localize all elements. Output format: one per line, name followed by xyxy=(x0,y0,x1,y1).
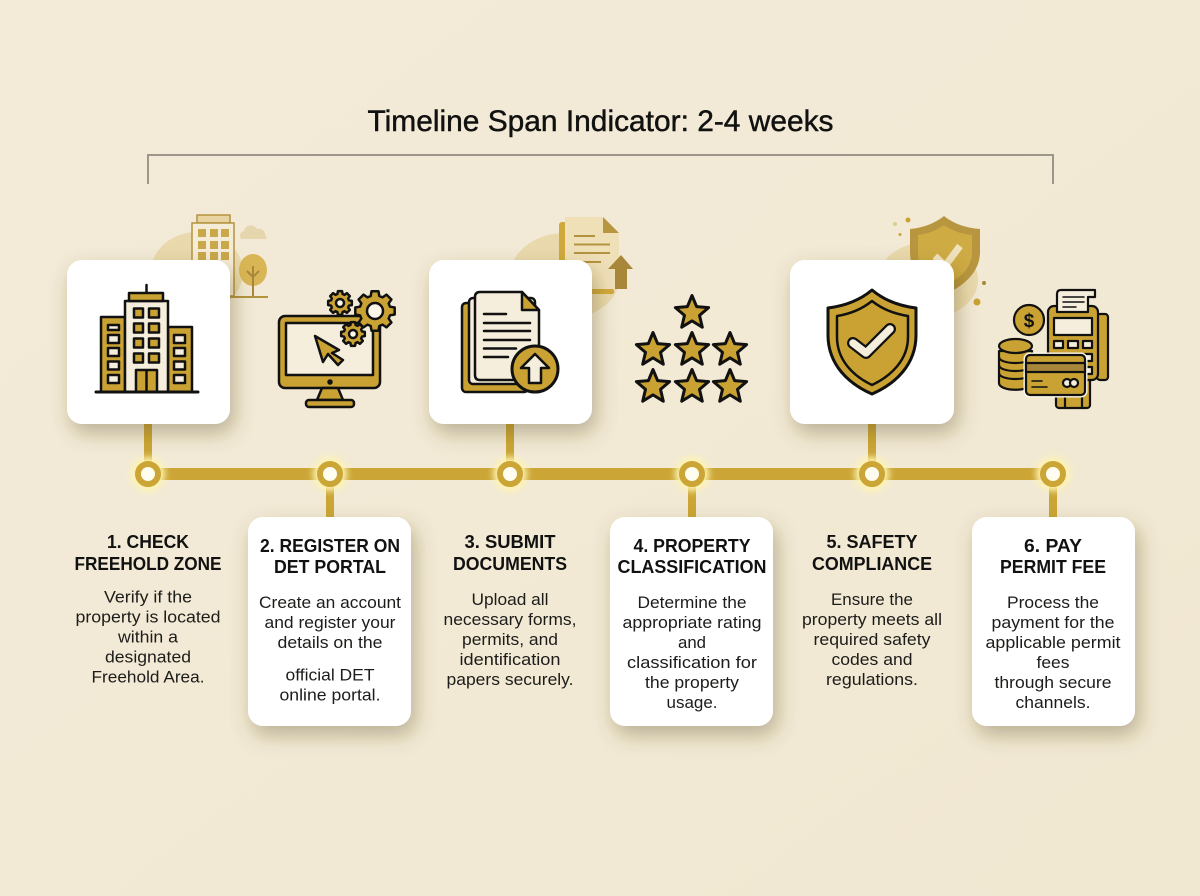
description xyxy=(259,594,401,704)
heading: 6. PAY xyxy=(1024,535,1083,556)
heading: PERMIT FEE xyxy=(1000,556,1106,577)
icon: office building xyxy=(96,285,198,392)
description: regulations. xyxy=(826,671,918,689)
description: Ensure the xyxy=(831,591,913,609)
heading: FREEHOLD ZONE xyxy=(74,553,222,574)
title: Timeline Span Indicator: 2-4 weeks xyxy=(368,105,834,138)
heading xyxy=(1000,535,1106,577)
heading: 4. PROPERTY xyxy=(634,535,751,556)
heading xyxy=(260,535,400,577)
description: fees xyxy=(1036,654,1070,672)
icon: shield with check xyxy=(828,290,916,394)
panel: step 2 card xyxy=(248,517,411,726)
timeline track xyxy=(144,423,1057,518)
panel: step 6 card xyxy=(972,517,1135,726)
description: codes and xyxy=(832,651,912,669)
panel: icon card 3 xyxy=(429,260,592,424)
description: identification xyxy=(460,651,560,669)
panel: icon card 1 xyxy=(67,260,230,424)
description: Create an account xyxy=(259,594,401,612)
heading: 5. SAFETY xyxy=(826,531,918,552)
heading: 2. REGISTER ON xyxy=(260,535,400,556)
icon: rating stars xyxy=(636,296,747,401)
icon: computer with gears xyxy=(279,291,395,407)
heading: DOCUMENTS xyxy=(453,553,567,574)
step 4: property classification xyxy=(610,517,773,726)
step 6: pay permit fee xyxy=(972,517,1135,726)
heading xyxy=(74,531,222,574)
description: appropriate rating xyxy=(622,614,762,632)
heading: COMPLIANCE xyxy=(812,553,932,574)
step 2: register on DET portal xyxy=(248,517,411,726)
icon: faded building background xyxy=(151,215,268,312)
heading xyxy=(453,531,567,574)
description xyxy=(986,594,1121,712)
description: usage. xyxy=(666,694,718,712)
description: Determine the xyxy=(638,594,746,612)
timeline span bracket xyxy=(148,155,1053,184)
description xyxy=(444,591,576,689)
description: Upload all xyxy=(472,591,548,609)
description: necessary forms, xyxy=(444,611,576,629)
panel: icon card 5 xyxy=(790,260,954,424)
description xyxy=(622,594,762,712)
icon: payment terminal, coins and card xyxy=(999,290,1108,408)
description: the property xyxy=(645,674,740,692)
description: official DET xyxy=(286,666,374,684)
icon: faded document background xyxy=(510,217,633,319)
description: Process the xyxy=(1007,594,1099,612)
description xyxy=(76,588,220,686)
description: property meets all xyxy=(802,611,942,629)
heading xyxy=(812,531,932,574)
description: and xyxy=(678,634,706,652)
description: Verify if the xyxy=(104,588,192,606)
description: details on the xyxy=(278,634,382,652)
description: required safety xyxy=(814,631,931,649)
description: property is located xyxy=(76,608,220,626)
step 5: safety compliance xyxy=(802,531,942,689)
heading: CLASSIFICATION xyxy=(618,556,766,577)
description: permits, and xyxy=(462,631,558,649)
description: online portal. xyxy=(280,686,380,704)
step 1: check freehold zone xyxy=(74,531,222,686)
description xyxy=(802,591,942,689)
description: and register your xyxy=(264,614,396,632)
heading: DET PORTAL xyxy=(274,556,386,577)
icon: faded shield background xyxy=(878,216,986,318)
panel: step 4 card xyxy=(610,517,773,726)
description: through secure xyxy=(994,674,1112,692)
icon: payment terminal, coins and card: $ xyxy=(1024,311,1035,332)
timeline nodes xyxy=(131,457,1070,491)
step 3: submit documents xyxy=(444,531,576,689)
heading: 1. CHECK xyxy=(107,531,190,552)
description: papers securely. xyxy=(446,671,574,689)
description: applicable permit xyxy=(986,634,1121,652)
description: payment for the xyxy=(992,614,1114,632)
heading: 3. SUBMIT xyxy=(464,531,556,552)
icon: documents with upload arrow xyxy=(462,292,558,392)
description: Freehold Area. xyxy=(92,668,204,686)
heading xyxy=(618,535,766,577)
description: designated xyxy=(105,648,191,666)
description: within a xyxy=(117,628,179,646)
description: classification for xyxy=(627,654,758,672)
description: channels. xyxy=(1016,694,1090,712)
